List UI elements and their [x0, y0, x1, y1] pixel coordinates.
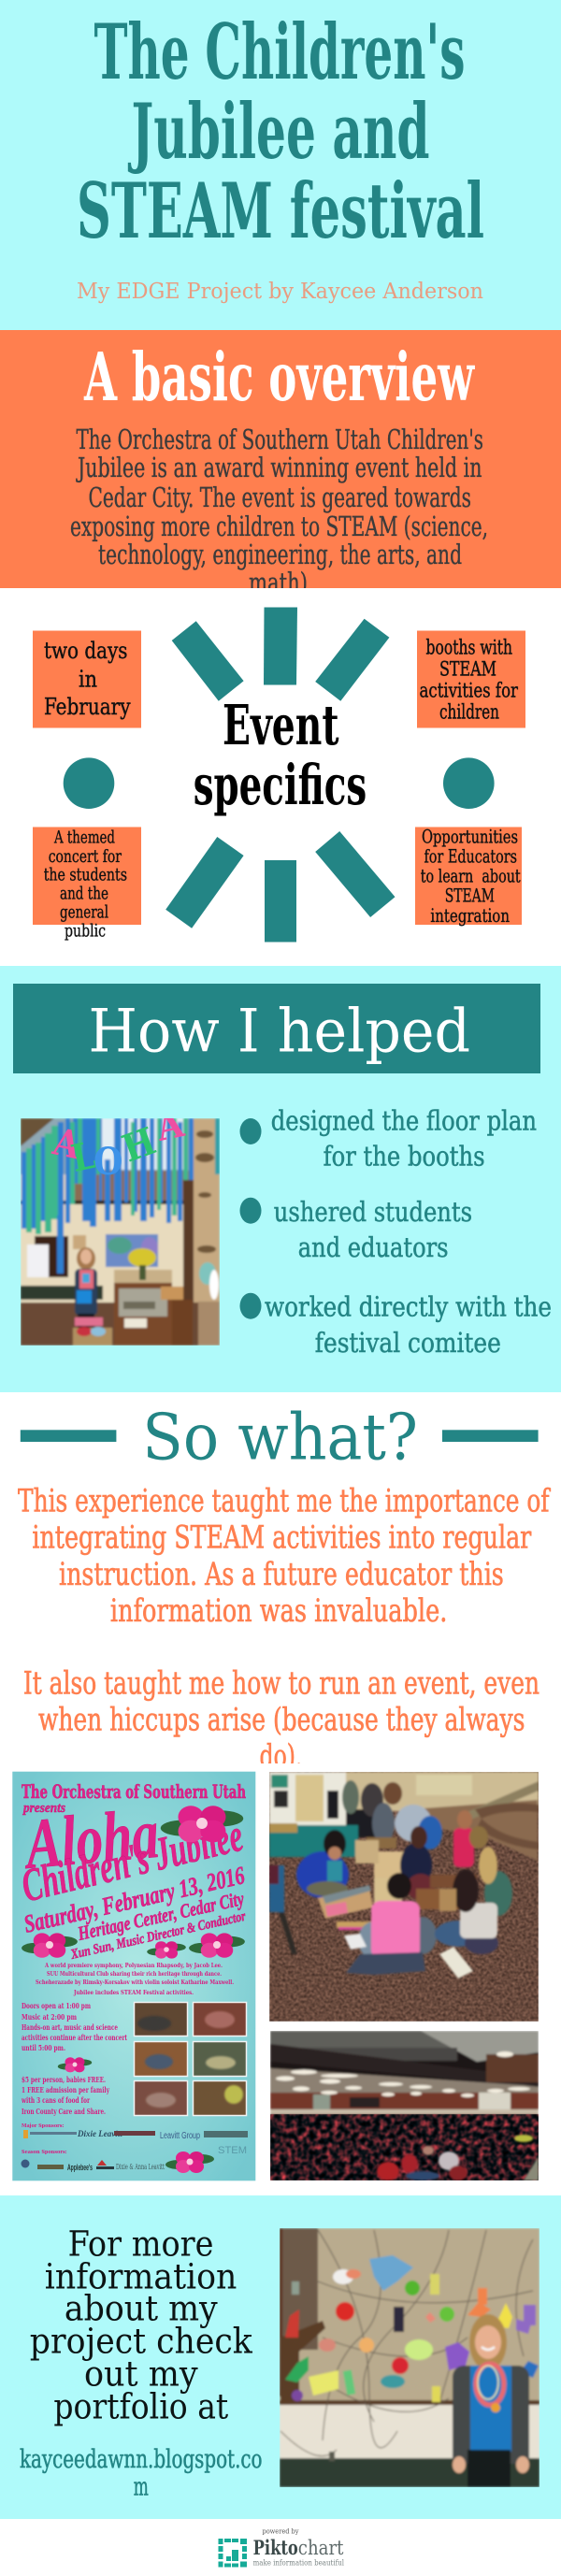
poster: Aloha Children's Jubilee: SUU Multicultural Club sharing their rich heritage through dance. [47, 1970, 222, 1978]
ALOHA letters in photo [50, 1118, 186, 1174]
panel: how I helped [0, 966, 561, 1392]
banner [13, 984, 540, 1073]
poster: Aloha Children's Jubilee: STEM [218, 2145, 247, 2156]
bullet: ushered students: ushered students [274, 1197, 472, 1228]
box: booths [417, 630, 525, 727]
bullet: floor plan: designed the floor plan [271, 1105, 537, 1137]
call to action text: For more [68, 2224, 214, 2265]
box: opportunities for educators: for Educators [424, 846, 517, 868]
box: opportunities for educators: STEAM [445, 885, 495, 906]
reflection text: do). [260, 1738, 302, 1776]
call to action text: project check [30, 2322, 253, 2362]
poster: Aloha Children's Jubilee: until 5:00 pm. [22, 2044, 65, 2053]
heading: event specifics: specifics [194, 753, 367, 817]
poster: Aloha Children's Jubilee: Saturday, February 13, 2016 [22, 1861, 248, 1938]
heading: event specifics [194, 693, 367, 817]
title [77, 8, 484, 256]
box: two days in February: two days [44, 638, 127, 664]
photo: Kaycee with fishing net display [280, 2228, 539, 2487]
title: Jubilee and [127, 88, 430, 177]
logo text [253, 2526, 345, 2568]
heading: so what: So what? [142, 1402, 418, 1475]
call to action text: information [45, 2256, 237, 2296]
logo text: make information beautiful [253, 2558, 345, 2568]
box: themed concert: general [60, 903, 108, 923]
poster: Aloha Children's Jubilee: Applebee's [67, 2163, 93, 2172]
photo: Aloha lobby with streamers [21, 1101, 220, 1346]
panel: so what [0, 1392, 561, 2195]
poster: Aloha Children's Jubilee: Heritage Center, Cedar City [75, 1887, 246, 1945]
poster: Aloha Children's Jubilee: Dixie Leavitt [77, 2129, 122, 2138]
heading: so what [21, 1402, 539, 1475]
portfolio link [20, 2445, 262, 2501]
bullet: worked with comitee [239, 1292, 552, 1359]
ALOHA letters in photo: A [151, 1101, 188, 1150]
box: opportunities for educators: Opportunities [422, 827, 518, 847]
bullet: ushered students [239, 1197, 472, 1263]
poster: Aloha Children's Jubilee: Music at 2:00 pm [22, 2013, 77, 2022]
panel: event specifics [0, 588, 561, 967]
box: two days in February: February [44, 694, 131, 720]
box: themed concert: the students [44, 866, 127, 885]
panel: title [0, 0, 561, 331]
poster: Aloha Children's Jubilee: Scheherazade by Rimsky-Korsakov with violin soloist Katharine Maxwell. [36, 1979, 234, 1986]
poster: Aloha Children's Jubilee: Leavitt Group [160, 2131, 200, 2141]
box: themed concert [33, 827, 141, 942]
photo: children at instrument booth [269, 1772, 539, 2022]
overview text [70, 424, 488, 598]
logo text: Pikto [253, 2536, 298, 2559]
reflection text [18, 1483, 552, 1776]
poster: Aloha Children's Jubilee: The Orchestra of Southern Utah [22, 1780, 246, 1803]
bullet: floor plan: for the booths [324, 1142, 485, 1173]
box: booths: booths with [426, 636, 512, 658]
poster: Aloha Children's Jubilee: activities continue after the concert [22, 2034, 127, 2043]
banner: How I helped [88, 997, 470, 1066]
poster: Aloha Children's Jubilee: with 3 cans of food for [21, 2096, 91, 2106]
footer: powered by Piktochart [0, 2519, 561, 2576]
ALOHA letters in photo: H [117, 1119, 162, 1171]
bullet: worked with comitee: festival comitee [315, 1328, 501, 1359]
photo: concert audience [270, 2031, 539, 2180]
logo text: chart [298, 2537, 344, 2559]
box: themed concert: concert for [49, 847, 122, 867]
poster: Aloha Children's Jubilee: $5 per person, babies FREE. [22, 2076, 106, 2085]
call to action text: about my [65, 2289, 218, 2329]
ALOHA letters in photo: A [49, 1119, 85, 1168]
box: opportunities for educators: to learn about [421, 865, 521, 886]
bullet: floor plan [239, 1105, 537, 1173]
poster: Aloha Children's Jubilee: Hands-on art, music and science [22, 2023, 118, 2033]
bullet: ushered students: and eduators [298, 1232, 449, 1263]
call to action text: out my [84, 2354, 198, 2395]
overview text: math) [249, 567, 308, 598]
poster: Aloha Children's Jubilee: Major Sponsors: [22, 2123, 65, 2129]
poster: Aloha Children's Jubilee: A world premiere symphony, Polynesian Rhapsody, by Jacob Lee. [44, 1962, 223, 1969]
portfolio link: m [134, 2472, 149, 2501]
poster: Aloha Children's Jubilee: Aloha [20, 1794, 162, 1884]
poster: Aloha Children's Jubilee: Dixie & Anna Leavitt [116, 2163, 165, 2171]
logo text: powered by [262, 2526, 299, 2536]
ALOHA letters in photo: O [94, 1140, 122, 1184]
box: booths: activities for [419, 679, 519, 701]
icon: Piktochart logo [219, 2539, 247, 2568]
poster: Aloha Children's Jubilee: Iron County Care and Share. [22, 2108, 106, 2117]
box: themed concert: public [65, 922, 106, 942]
call to action text [30, 2224, 253, 2427]
box: themed concert: A themed [53, 828, 115, 847]
poster: Aloha Children's Jubilee: Jubilee includes STEAM Festival activities. [73, 1989, 194, 1996]
box: two days in February [33, 630, 141, 727]
call to action text: portfolio at [53, 2387, 229, 2427]
poster: Aloha Children's Jubilee: presents [22, 1801, 65, 1816]
box: opportunities for educators [415, 827, 522, 927]
box: two days in February: in [79, 666, 97, 692]
reflection text: information was invaluable. [110, 1592, 447, 1630]
box: booths: children [439, 701, 499, 724]
subtitle: My EDGE Project by Kaycee Anderson [77, 280, 483, 304]
poster: Aloha Children's Jubilee: Children's Jubilee [16, 1808, 248, 1912]
portfolio link: kayceedawnn.blogspot.co [20, 2445, 262, 2474]
poster: Aloha Children's Jubilee [12, 1772, 255, 2180]
poster: Aloha Children's Jubilee: 1 FREE admission per family [22, 2086, 109, 2095]
radial bars [64, 608, 495, 943]
heading: event specifics: Event [223, 693, 339, 757]
panel: for more information [0, 2195, 561, 2519]
bullet: worked with comitee: worked directly with the [265, 1292, 552, 1323]
panel: a basic overview [0, 330, 561, 598]
box: opportunities for educators: integration [430, 905, 510, 927]
box: booths: STEAM [439, 658, 496, 681]
ALOHA letters in photo: L [67, 1133, 100, 1181]
poster: Aloha Children's Jubilee: Doors open at 1:00 pm [22, 2002, 91, 2011]
box: themed concert: and the [60, 885, 108, 904]
poster: Aloha Children's Jubilee: Season Sponsors: [22, 2150, 67, 2155]
overview text: technology, engineering, the arts, and [98, 539, 462, 570]
poster: Aloha Children's Jubilee: Xun Sun, Music Director & Conductor [69, 1909, 247, 1963]
